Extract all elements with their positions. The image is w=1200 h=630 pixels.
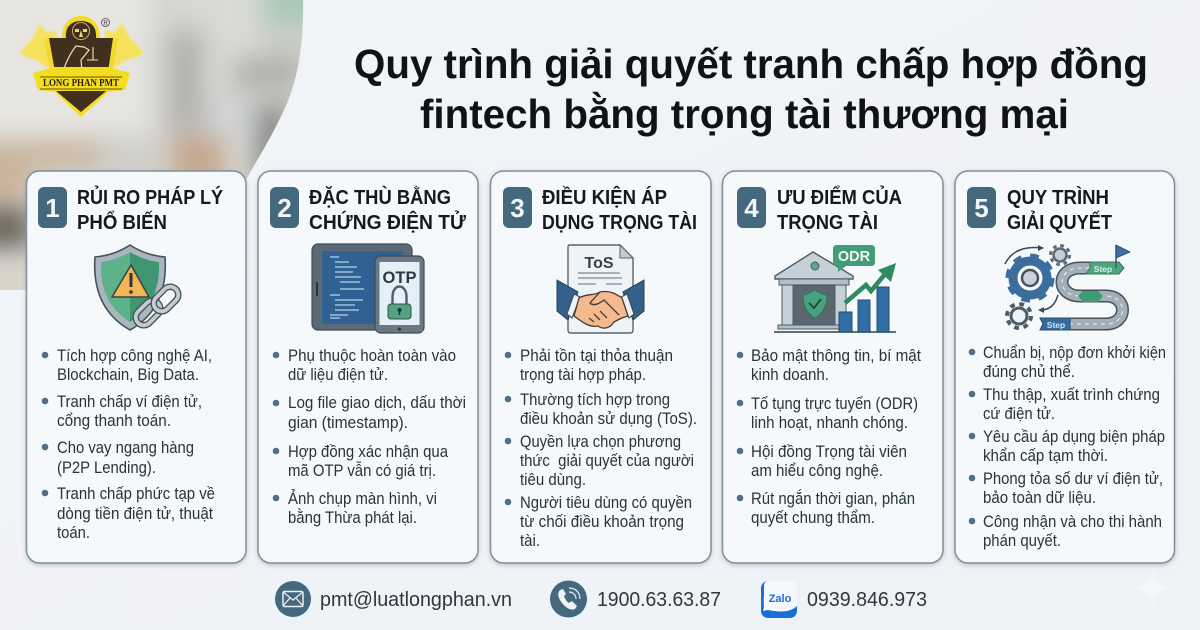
- panel 1: legal risks: [26, 171, 246, 563]
- contact: Zalo: [761, 581, 927, 618]
- title: Quy trình giải quyết tranh chấp hợp đồng: [354, 41, 1148, 87]
- contact: phone: 1900.63.63.87: [597, 588, 721, 611]
- icon: gears and winding road with flag: Step: [1047, 320, 1065, 330]
- logo: Long Phan PMT: R: [103, 21, 108, 27]
- number badge 1: 1: [45, 193, 60, 223]
- bullet list 5: Thu thập, xuất trình chứng: [983, 385, 1160, 404]
- heading 5: GIẢI QUYẾT: [1007, 211, 1112, 234]
- bullet list 5: [969, 343, 1166, 550]
- heading 4: ƯU ĐIỂM CỦA: [777, 185, 902, 209]
- bullet list 5: Công nhận và cho thi hành: [983, 512, 1162, 531]
- contact: Zalo: 0939.846.973: [807, 588, 927, 611]
- panel 3: arbitration conditions: [490, 171, 711, 563]
- bullet list 3: Phải tồn tại thỏa thuận: [520, 346, 673, 365]
- bullet list 3: từ chối điều khoản trọng: [520, 512, 684, 531]
- bullet list 4: am hiểu công nghệ.: [751, 461, 883, 480]
- bullet list 2: Phụ thuộc hoàn toàn vào: [288, 346, 456, 365]
- logo: Long Phan PMT: [20, 16, 143, 117]
- number badge 3: 3: [510, 193, 525, 223]
- icon: gears and winding road with flag: [1005, 245, 1130, 330]
- title: fintech bằng trọng tài thương mại: [420, 91, 1069, 137]
- bullet list 1: toán.: [57, 523, 90, 542]
- bullet list 5: khẩn cấp tạm thời.: [983, 446, 1108, 465]
- bullet list 4: linh hoạt, nhanh chóng.: [751, 413, 908, 432]
- bullet list 5: cứ điện tử.: [983, 404, 1055, 423]
- contact: email: pmt@luatlongphan.vn: [320, 588, 512, 611]
- number badge 4: [737, 187, 766, 228]
- bullet list 3: tài.: [520, 531, 540, 550]
- bullet list 5: Yêu cầu áp dụng biện pháp: [983, 427, 1165, 446]
- heading 3: [542, 185, 697, 234]
- bullet list 1: Tích hợp công nghệ AI,: [57, 346, 212, 365]
- number badge 2: [270, 187, 299, 228]
- heading 5: QUY TRÌNH: [1007, 186, 1109, 209]
- contact: email: [275, 581, 512, 617]
- heading 1: RỦI RO PHÁP LÝ: [77, 185, 223, 209]
- bullet list 3: Quyền lựa chọn phương: [520, 432, 681, 451]
- bullet list 4: quyết chung thẩm.: [751, 508, 875, 527]
- bullet list 3: thức giải quyết của người: [520, 451, 694, 470]
- icon: gears and winding road with flag: Step: [1094, 264, 1112, 274]
- heading 2: ĐẶC THÙ BẰNG: [309, 185, 451, 209]
- number badge 2: 2: [277, 193, 292, 223]
- bullet list 2: bằng Thừa phát lại.: [288, 508, 417, 527]
- panel 5: resolution process: [955, 171, 1174, 563]
- number badge 3: [503, 187, 532, 228]
- bullet list 1: [42, 346, 215, 542]
- heading 4: [777, 185, 902, 234]
- icon: shield with warning and chain: [95, 245, 182, 330]
- bullet list 2: Ảnh chụp màn hình, vi: [288, 489, 437, 508]
- bullet list 3: Thường tích hợp trong: [520, 390, 670, 409]
- number badge 5: [967, 187, 996, 228]
- logo: Long Phan PMT: LONG PHAN PMT: [43, 78, 119, 89]
- panel 2: electronic evidence: [258, 171, 478, 563]
- heading 2: [309, 185, 466, 234]
- bullet list 1: (P2P Lending).: [57, 458, 156, 477]
- bullet list 3: điều khoản sử dụng (ToS).: [520, 409, 697, 428]
- icon: courthouse, ODR bubble and growth chart: ODR: [838, 249, 871, 265]
- bullet list 2: Hợp đồng xác nhận qua: [288, 442, 449, 461]
- title: [354, 41, 1148, 137]
- bullet list 5: phán quyết.: [983, 531, 1061, 550]
- bullet list 4: kinh doanh.: [751, 365, 829, 384]
- bullet list 2: Log file giao dịch, dấu thời: [288, 393, 466, 412]
- bullet list 1: Tranh chấp ví điện tử,: [57, 392, 202, 411]
- bullet list 4: Hội đồng Trọng tài viên: [751, 442, 907, 461]
- bullet list 2: dữ liệu điện tử.: [288, 365, 388, 384]
- bullet list 3: [505, 346, 697, 550]
- number badge 5: 5: [974, 193, 989, 223]
- bullet list 4: Bảo mật thông tin, bí mật: [751, 346, 921, 365]
- bullet list 1: cổng thanh toán.: [57, 411, 171, 430]
- heading 2: CHỨNG ĐIỆN TỬ: [309, 210, 466, 234]
- icon: ToS document and handshake: ToS: [584, 255, 614, 272]
- bullet list 3: trọng tài hợp pháp.: [520, 365, 646, 384]
- number badge 1: [38, 187, 67, 228]
- number badge 4: 4: [744, 193, 759, 223]
- icon: ToS document and handshake: [557, 245, 644, 333]
- bullet list 5: bảo toàn dữ liệu.: [983, 488, 1096, 507]
- heading 4: TRỌNG TÀI: [777, 211, 878, 234]
- contact: Zalo: Zalo: [769, 593, 792, 605]
- icon: tablet code and OTP phone: OTP: [383, 269, 416, 287]
- bullet list 3: Người tiêu dùng có quyền: [520, 493, 692, 512]
- heading 1: PHỔ BIẾN: [77, 210, 167, 234]
- bullet list 2: gian (timestamp).: [288, 413, 408, 432]
- bullet list 2: mã OTP vẫn có giá trị.: [288, 461, 436, 480]
- bullet list 5: đúng chủ thể.: [983, 362, 1075, 381]
- icon: tablet code and OTP phone: [312, 244, 424, 333]
- heading 3: DỤNG TRỌNG TÀI: [542, 211, 697, 234]
- bullet list 5: Phong tỏa số dư ví điện tử,: [983, 469, 1163, 488]
- heading 3: ĐIỀU KIỆN ÁP: [542, 185, 667, 209]
- panel 4: arbitration advantages: [722, 171, 943, 563]
- bullet list 1: Tranh chấp phức tạp về: [57, 484, 215, 503]
- heading 1: [77, 185, 223, 234]
- blurred photo background: [0, 0, 304, 290]
- heading 5: [1007, 186, 1112, 234]
- bullet list 3: tiêu dùng.: [520, 470, 586, 489]
- icon: courthouse, ODR bubble and growth chart: [774, 245, 896, 332]
- bullet list 5: Chuẩn bị, nộp đơn khởi kiện: [983, 343, 1166, 362]
- bullet list 4: [737, 346, 921, 527]
- contact: phone: [550, 580, 721, 618]
- bullet list 4: Tố tụng trực tuyến (ODR): [751, 394, 918, 413]
- bullet list 2: [273, 346, 466, 527]
- decorative sparkle: [1133, 569, 1173, 607]
- bullet list 4: Rút ngắn thời gian, phán: [751, 489, 915, 508]
- bullet list 1: Cho vay ngang hàng: [57, 438, 194, 457]
- bullet list 1: dòng tiền điện tử, thuật: [57, 504, 213, 523]
- bullet list 1: Blockchain, Big Data.: [57, 365, 199, 384]
